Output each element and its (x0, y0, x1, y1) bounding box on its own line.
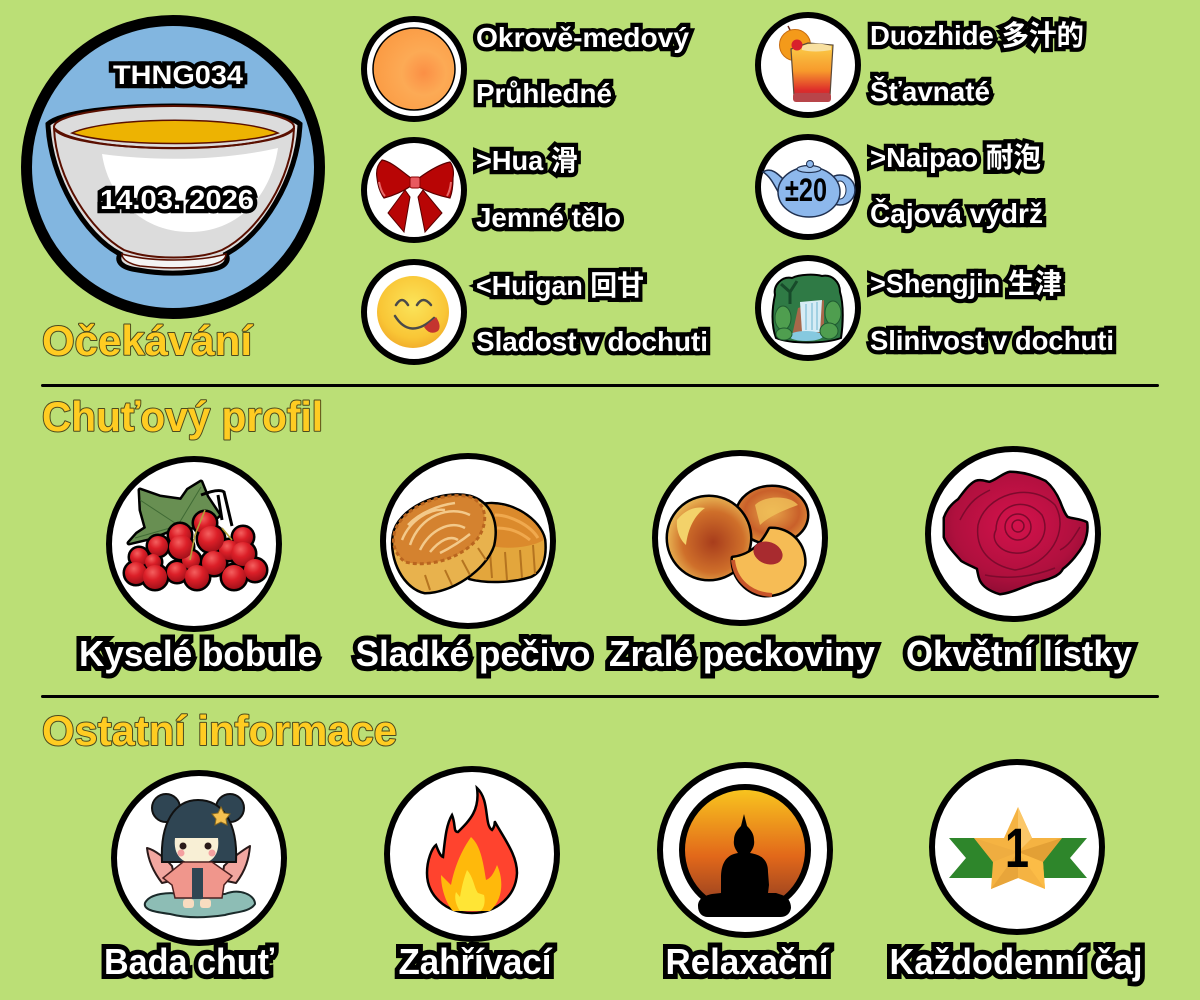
icon: smiling face (377, 276, 449, 348)
panel: petals (906, 449, 1132, 674)
colour name: Okrově-medový (476, 22, 689, 53)
heading: Očekávání: Očekávání (42, 317, 253, 364)
juicy term: Duozhide 多汁的 (870, 20, 1084, 51)
label: Zralé peckoviny (609, 633, 875, 674)
panel: Bada flavour (104, 773, 284, 982)
juicy label: Šťavnaté (870, 75, 990, 107)
heading: Chuťový profil: Chuťový profil (42, 393, 323, 440)
icon: liquor colour disc (373, 28, 455, 110)
endurance term: >Naipao 耐泡 (870, 142, 1041, 173)
panel: relaxing (660, 765, 830, 982)
heading: Ostatní informace: Ostatní informace (42, 707, 397, 754)
panel: aftertaste sweetness item (364, 262, 708, 362)
panel: salivation item (758, 258, 1114, 358)
panel: warming (387, 769, 557, 982)
salivation label: Slinivost v dochuti (870, 325, 1114, 356)
body term: >Hua 滑 (476, 145, 578, 176)
star number: 1 (1005, 816, 1029, 879)
label: Okvětní lístky (906, 633, 1132, 674)
panel: juiciness item (758, 15, 1084, 115)
icon: cocktail glass (780, 26, 833, 102)
endurance label: Čajová výdrž (870, 197, 1043, 229)
body label: Jemné tělo (476, 202, 621, 233)
icon: tea bowl (48, 106, 300, 273)
label: Relaxační (666, 941, 829, 982)
icon: chibi girl (145, 794, 255, 917)
icon: meditating silhouette in sun (682, 787, 808, 917)
icon: peaches (668, 487, 807, 595)
icon: flame (427, 788, 517, 913)
panel: sweet pastry (356, 456, 590, 674)
clarity: Průhledné (476, 78, 612, 109)
panel: tea bowl badge (26, 20, 320, 314)
sweetness label: Sladost v dochuti (476, 326, 708, 357)
icon: red rose (945, 473, 1086, 593)
panel: colour item (364, 19, 689, 119)
icon: red currants (125, 482, 266, 589)
icon: blue teapot (763, 160, 855, 217)
panel: body item (364, 140, 621, 240)
label: Bada chuť (104, 941, 275, 982)
panel: ripe stone fruit (609, 453, 875, 674)
label: Kyselé bobule (79, 633, 317, 674)
icon: mooncakes (393, 496, 544, 592)
badge date: 14.03. 2026 (100, 184, 254, 215)
panel: everyday tea (890, 762, 1142, 982)
panel: sour berries (79, 459, 317, 674)
icon: blue teapot: ±20 (785, 172, 827, 208)
icon: gold star (974, 807, 1062, 889)
label: Zahřívací (398, 941, 552, 982)
panel: steeping endurance item (758, 137, 1043, 237)
salivation term: >Shengjin 生津 (870, 268, 1062, 299)
sweetness term: <Huigan 回甘 (476, 270, 644, 301)
icon: jungle waterfall (772, 275, 843, 342)
label: Sladké pečivo (356, 633, 590, 674)
icon: red bow (377, 160, 453, 232)
badge code: THNG034 (113, 60, 243, 90)
icon: green ribbon (949, 838, 1087, 878)
label: Každodenní čaj (890, 941, 1142, 982)
